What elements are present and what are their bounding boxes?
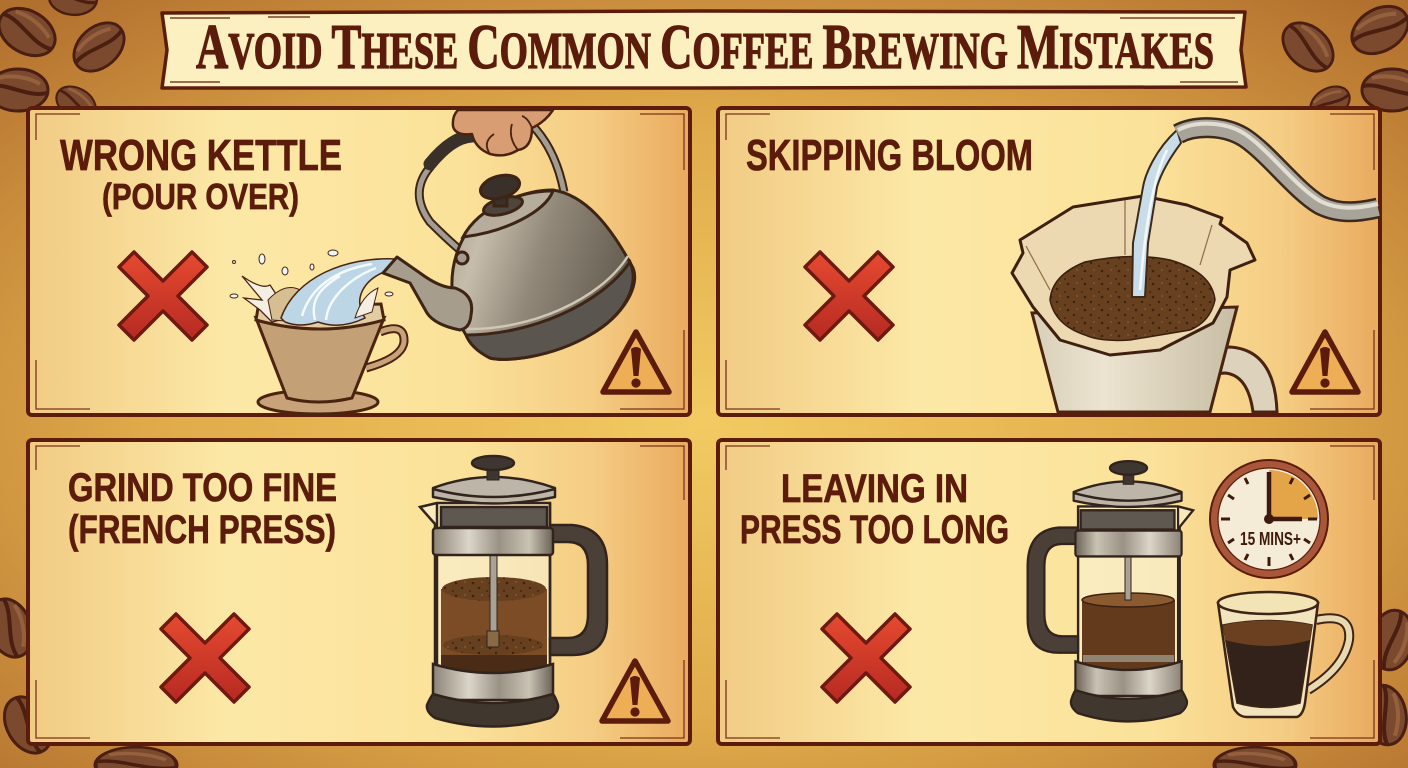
illustration: hand [453, 110, 553, 155]
heading: leaving in press too long: LEAVING IN [781, 467, 968, 511]
icon: warning [602, 661, 668, 721]
illustration: kettle [383, 118, 635, 359]
panel: wrong kettle [28, 108, 690, 415]
icon: red x [119, 252, 207, 340]
icon: red x [805, 252, 893, 340]
illustration: gooseneck and water [1132, 124, 1378, 297]
illustration: coffee grounds [1050, 256, 1215, 340]
illustration: water splash [230, 250, 397, 325]
clock label: 15 MINS+ [1240, 529, 1301, 549]
illustration: paper filter [1012, 196, 1255, 355]
heading: wrong kettle: WRONG KETTLE [60, 131, 342, 180]
heading: skipping bloom: SKIPPING BLOOM [746, 131, 1033, 180]
subheading: french press: (FRENCH PRESS) [68, 508, 336, 552]
illustration: mug [1032, 307, 1277, 412]
illustration: dripper cup [256, 304, 404, 414]
subheading: pour over: (POUR OVER) [102, 176, 299, 217]
icon: warning [1292, 332, 1358, 392]
title banner [162, 11, 1246, 88]
title: AVOID THESE COMMON COFFEE BREWING MISTAKES [196, 11, 1214, 82]
panel: leaving in press too long [718, 440, 1380, 744]
illustration: french press [1028, 461, 1193, 721]
icon: clock 15 mins [1210, 460, 1328, 578]
illustration: french press [420, 456, 607, 726]
heading: grind too fine: GRIND TOO FINE [68, 466, 337, 510]
heading: leaving in press too long: PRESS TOO LONG [740, 508, 1009, 552]
icon: warning [603, 332, 669, 392]
icon: red x [822, 614, 910, 702]
heading: leaving in press too long [740, 467, 1009, 552]
panel: skipping bloom [718, 108, 1380, 415]
icon: red x [161, 614, 249, 702]
panel: grind too fine [28, 440, 690, 744]
illustration: glass coffee mug [1218, 592, 1349, 717]
